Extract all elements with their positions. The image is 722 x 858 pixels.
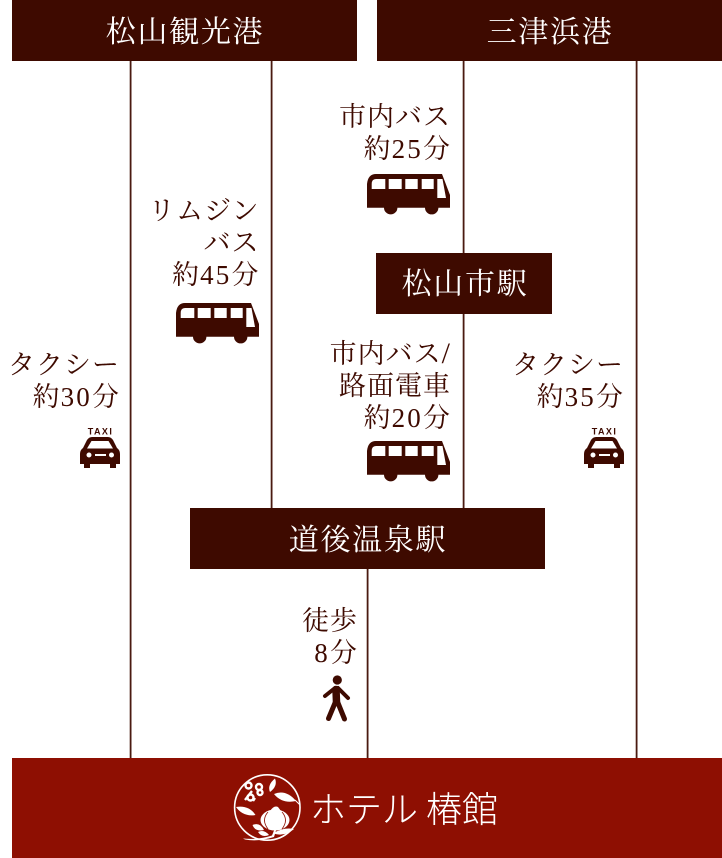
label: タクシー 約30分: 約30分 [33, 382, 120, 412]
heading: 三津浜港 [377, 0, 722, 61]
heading: 松山観光港 [12, 0, 357, 61]
label: タクシー 約30分 [8, 350, 120, 412]
icon: taxi: TAXI [592, 426, 617, 436]
label: タクシー 約35分 [512, 350, 624, 412]
label: 徒歩 8分 [302, 606, 358, 668]
label: タクシー 約35分: 約35分 [537, 382, 624, 412]
heading: 松山観光港: 松山観光港 [106, 16, 264, 49]
label: 徒歩 8分: 徒歩 [302, 606, 358, 636]
label: タクシー 約30分: タクシー [8, 350, 120, 380]
icon: bus [176, 303, 259, 343]
icon: bus [367, 441, 450, 481]
heading: 道後温泉駅: 道後温泉駅 [289, 524, 447, 557]
icon: taxi [584, 426, 624, 468]
icon: taxi [80, 426, 120, 468]
label: リムジンバス 約45分 [148, 196, 260, 290]
logo: hotel crest [235, 775, 300, 840]
label: 市内バス 約25分: 市内バス [339, 102, 451, 132]
icon: bus [367, 174, 450, 214]
label: 徒歩 8分: 8分 [314, 638, 358, 668]
label: リムジンバス 約45分: 約45分 [172, 260, 260, 290]
hotel name: ホテル椿館 [310, 789, 498, 830]
heading: 道後温泉駅 [190, 508, 545, 569]
panel: hotel banner [12, 758, 722, 858]
route lines [130, 61, 637, 758]
label: 市内バス/路面電車 約20分: 約20分 [364, 403, 451, 433]
label: 市内バス 約25分 [339, 102, 451, 164]
heading: 松山市駅 [376, 253, 552, 314]
label: 市内バス 約25分: 約25分 [364, 134, 451, 164]
label: 市内バス/路面電車 約20分: 路面電車 [339, 371, 451, 401]
label: タクシー 約35分: タクシー [512, 350, 624, 380]
heading: 松山市駅: 松山市駅 [402, 268, 528, 301]
label: リムジンバス 約45分: リムジン [148, 196, 260, 226]
icon: taxi: TAXI [88, 426, 113, 436]
label: 市内バス/路面電車 約20分 [330, 337, 451, 433]
icon: walking person [325, 675, 348, 719]
label: リムジンバス 約45分: バス [204, 228, 260, 258]
heading: 三津浜港: 三津浜港 [487, 16, 613, 49]
label: 市内バス/路面電車 約20分: 市内バス/ [330, 337, 451, 370]
